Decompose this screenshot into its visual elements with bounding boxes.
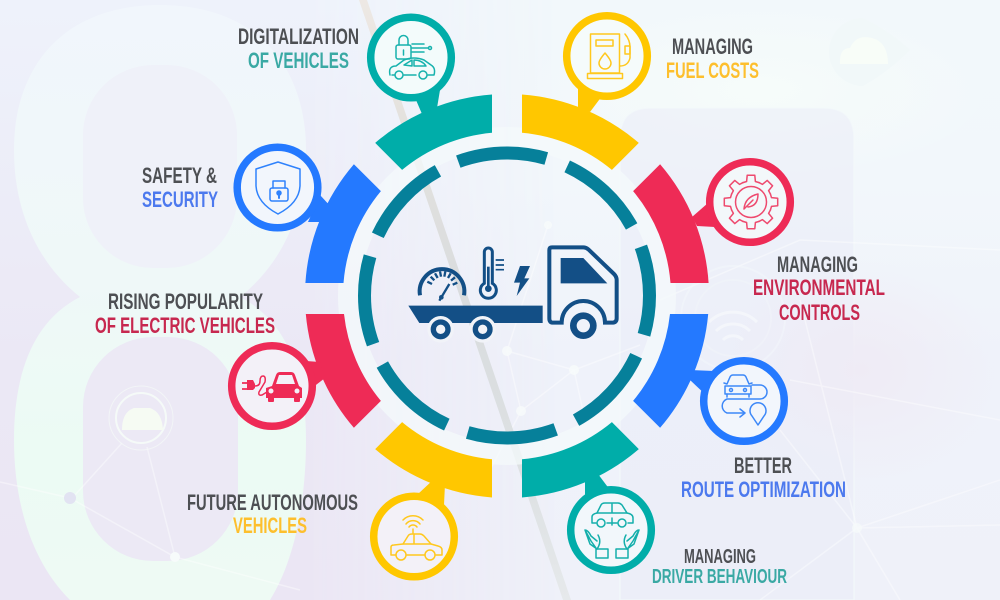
label: rising popularity of electric vehicles [95,289,275,338]
outer ring: digitalization segment [375,95,492,170]
icon: fuel pump [588,34,630,78]
outer ring: fuel segment [522,95,639,170]
callout: environmental badge [692,162,790,242]
icon: locked connected car [390,36,435,79]
label: better route optimization: ROUTE OPTIMIZATION [681,477,846,502]
callout: electric badge [232,346,325,426]
label: managing fuel costs: FUEL COSTS [666,58,759,83]
speedometer [420,269,464,301]
label: managing driver behaviour [652,546,787,588]
icon: gear with leaf [724,175,778,229]
callout: driver behaviour badge [571,474,651,570]
outer ring: driver segment [522,422,639,497]
callout: safety badge [237,147,332,228]
truck wheels and flatbed [408,306,593,343]
outer ring: route segment [633,314,708,428]
label: managing environmental controls: CONTROLS [779,300,860,325]
background: network lines [0,225,1000,600]
label: managing environmental controls [753,252,885,325]
outer ring: electric segment [306,314,381,428]
callout: digitalization badge [371,17,451,114]
icon: shield with lock [256,162,300,214]
center truck icon [408,247,617,343]
background: phone outline [620,108,854,600]
label: digitalization of vehicles [238,24,359,73]
icon: connected car [391,516,442,560]
label: better route optimization [681,453,846,502]
label: better route optimization: BETTER [734,453,792,478]
outer ring: environmental segment [633,164,709,283]
callout: fuel badge [567,16,647,112]
label: managing environmental controls: MANAGING [777,252,858,277]
label: managing fuel costs: MANAGING [672,34,753,59]
dashed inner ring [364,153,650,438]
lightning bolt [514,266,530,296]
thermometer [480,248,504,298]
background: cloud badge [829,18,910,86]
label: future autonomous vehicles: FUTURE AUTONOMOUS [187,490,358,515]
label: managing fuel costs [666,34,759,83]
label: future autonomous vehicles: VEHICLES [233,513,307,538]
background: diagonal pole [359,0,571,600]
label: safety and security: SAFETY & [142,163,217,188]
label: rising popularity of electric vehicles: OF ELECTRIC VEHICLES [95,313,275,338]
background: network nodes [64,221,862,562]
label: managing environmental controls: ENVIRONMENTAL [753,275,885,300]
label: safety and security [142,163,218,212]
icon: car held in hands [585,503,639,558]
label: future autonomous vehicles [187,490,358,538]
label: rising popularity of electric vehicles: RISING POPULARITY [108,289,263,314]
label: managing driver behaviour: DRIVER BEHAVIOUR [652,566,787,588]
label: digitalization of vehicles: OF VEHICLES [248,48,349,73]
outer ring: safety segment [305,164,381,283]
icon: car route with pin [722,375,767,425]
background: pale annulus [349,138,665,454]
background: large figure eight [14,5,306,600]
label: digitalization of vehicles: DIGITALIZATION [238,24,359,49]
label: safety and security: SECURITY [142,187,218,212]
truck window [561,258,607,283]
callout: route badge [690,361,784,441]
label: managing driver behaviour: MANAGING [684,546,756,568]
icon: electric car [242,372,302,402]
outer ring: autonomous segment [375,422,492,497]
background: connected car badge [109,386,173,450]
background: wifi badge [681,266,785,370]
callout: autonomous badge [374,480,454,577]
truck cab [549,247,617,323]
